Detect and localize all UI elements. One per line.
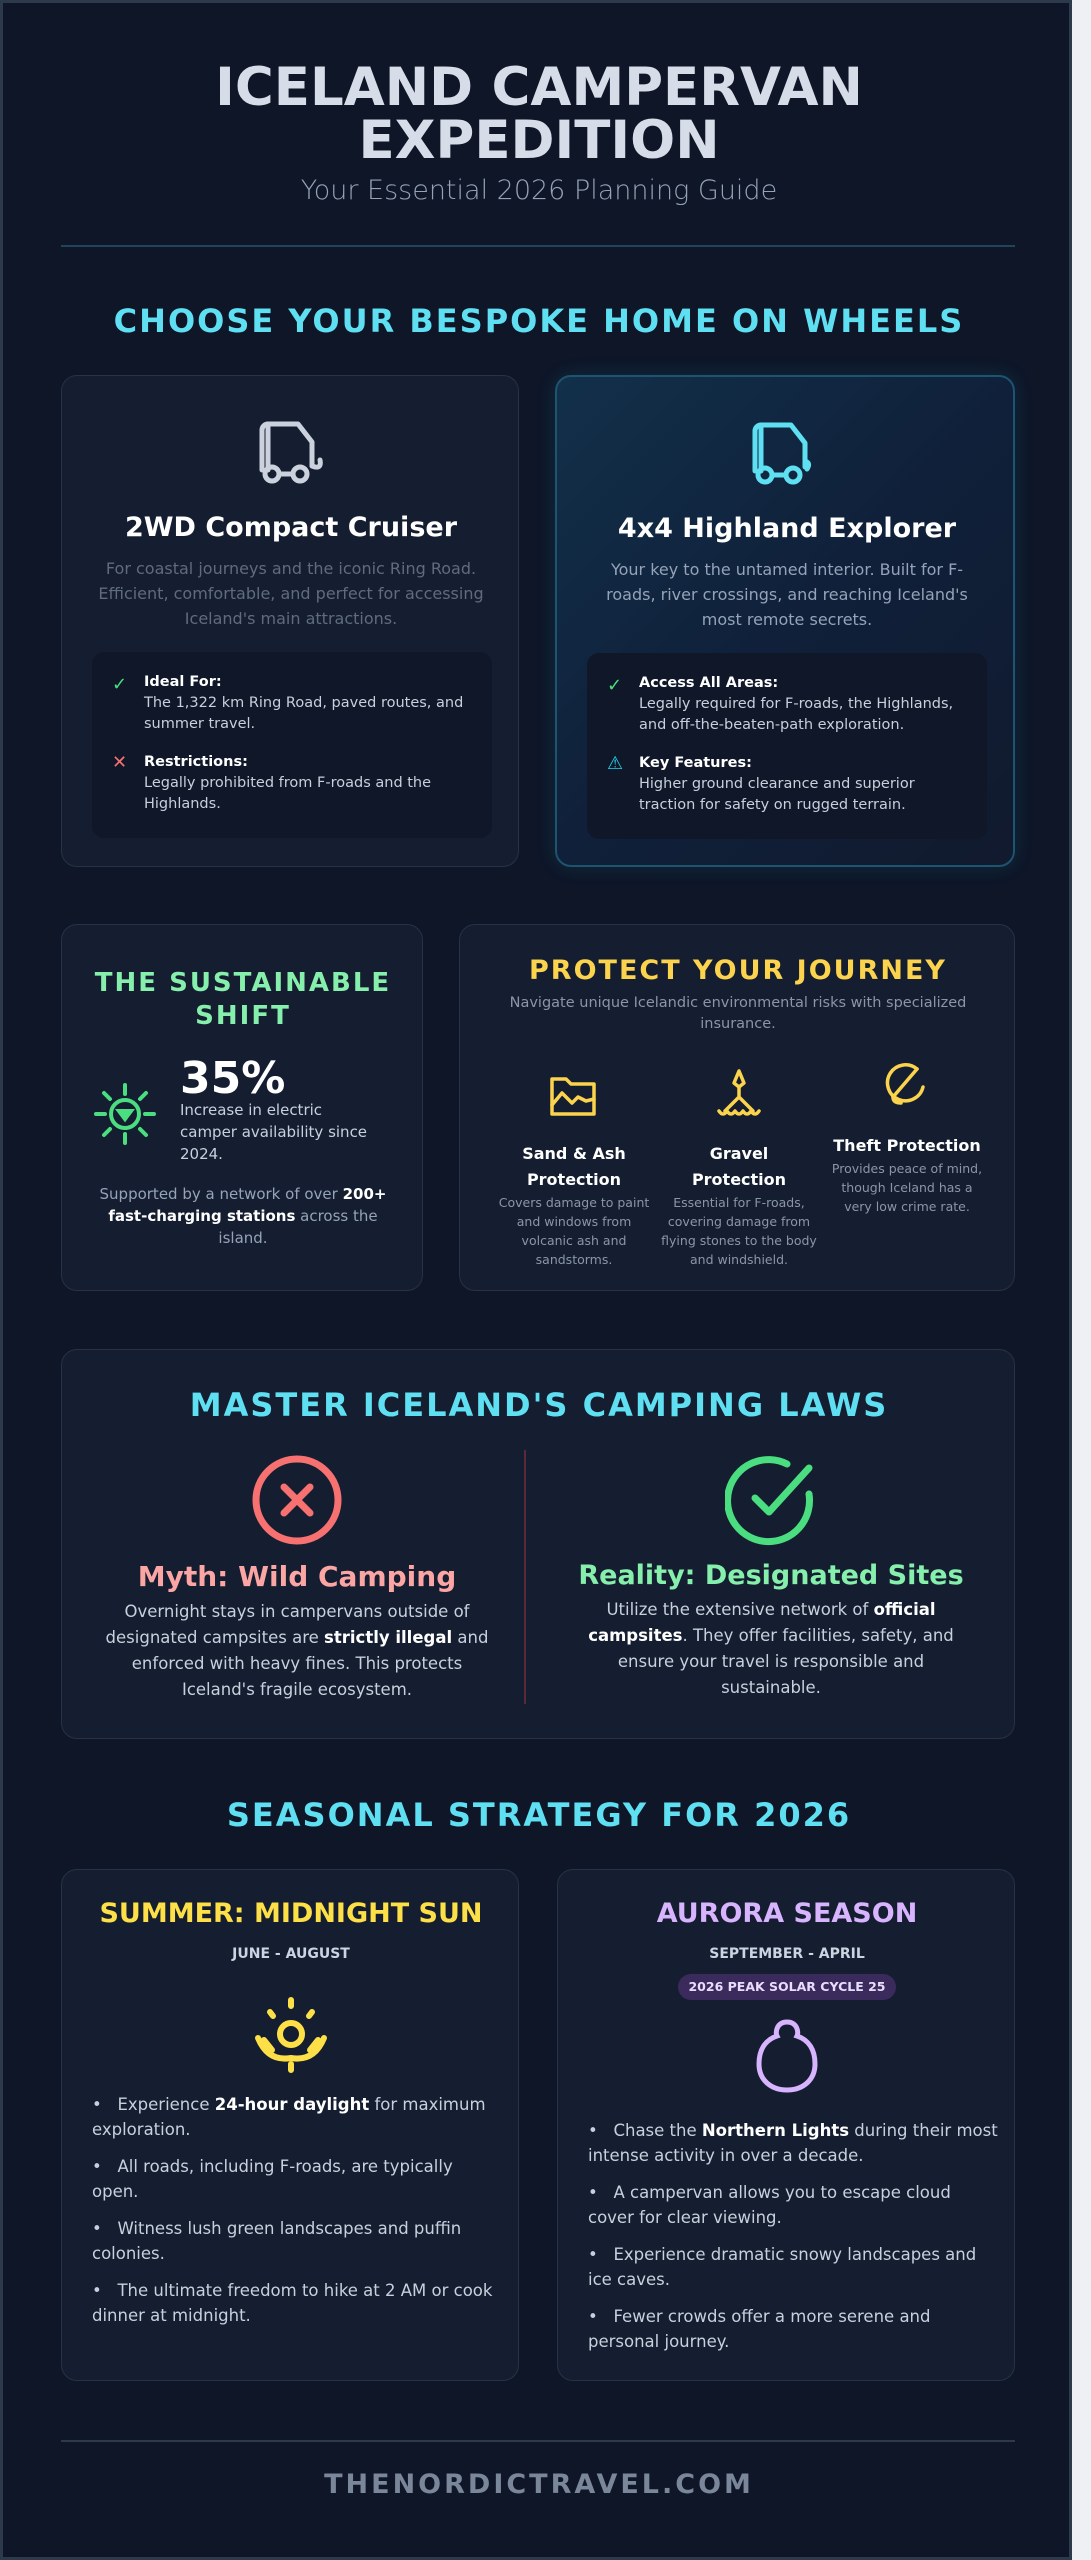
myth column: [106, 1456, 488, 1699]
panel: sustainable shift: [61, 924, 423, 1291]
icon: sun: [255, 1997, 327, 2073]
card title: 4x4 Highland Explorer: [618, 513, 956, 544]
item: access: Legally required for F-roads, the Highlands, and off-the-beaten-path exploration.: [639, 696, 953, 733]
heading: choose your home: CHOOSE YOUR BESPOKE HOME ON WHEELS: [114, 302, 964, 340]
column: sand & ash: Protection: [527, 1170, 621, 1189]
title: EXPEDITION: [358, 110, 720, 171]
icon: van cyan: [752, 422, 812, 484]
icon: aurora drop: [756, 2020, 818, 2092]
item: access: Access All Areas:: [639, 675, 778, 691]
bullet list: • Witness lush green landscapes and puffin colonies.: [92, 2219, 461, 2263]
column: gravel: [661, 1069, 817, 1267]
item: restrictions: ✕: [112, 752, 127, 773]
bullet list: • A campervan allows you to escape cloud: [588, 2183, 951, 2202]
icon: sun bulb: [94, 1083, 156, 1145]
myth column: Myth: Wild Camping: [138, 1560, 456, 1593]
card title: 2WD Compact Cruiser: [125, 512, 457, 543]
column: sand & ash: [499, 1077, 649, 1267]
heading: MASTER ICELAND'S CAMPING LAWS: [190, 1386, 888, 1424]
reality column: Utilize the extensive network of official campsites. They offer facilities, safety, and ensure your travel is responsible and sustainable.: [588, 1600, 954, 1697]
bullet list: • All roads, including F-roads, are typically open.: [92, 2157, 453, 2201]
feature box: [587, 653, 987, 839]
column: sand & ash: Sand & Ash: [522, 1144, 626, 1163]
bullet list: • Chase the Northern Lights during their most intense activity in over a decade.: [588, 2121, 998, 2165]
item: key features: Higher ground clearance and superior traction for safety on rugged terrain.: [639, 776, 915, 813]
bullet list: • Experience dramatic snowy landscapes and ice caves.: [588, 2245, 976, 2289]
note: Supported by a network of over 200+ fast-charging stations across the island.: [100, 1185, 386, 1247]
item: ideal for: The 1,322 km Ring Road, paved routes, and summer travel.: [144, 695, 463, 732]
reality column: Reality: Designated Sites: [578, 1560, 964, 1591]
panel: camping laws: [61, 1349, 1015, 1739]
item: access: ✓: [607, 675, 622, 696]
panel: aurora: AURORA SEASON: [657, 1898, 917, 1929]
icon: check circle: [725, 1456, 814, 1546]
divider: [524, 1450, 526, 1704]
title: ICELAND CAMPERVAN: [215, 57, 863, 118]
item: key features: Key Features:: [639, 755, 752, 771]
bullet list: cover for clear viewing.: [588, 2208, 782, 2227]
badge: [678, 1974, 896, 2000]
icon: x circle: [252, 1456, 342, 1544]
heading: THE SUSTAINABLE: [95, 968, 391, 998]
panel: summer: [61, 1869, 519, 2381]
description: For coastal journeys and the iconic Ring Road. Efficient, comfortable, and perfect for accessing Iceland's main attractions.: [98, 559, 484, 628]
item: ideal for: Ideal For:: [144, 674, 222, 690]
panel: protect your journey: [459, 924, 1015, 1291]
column: theft: Provides peace of mind, though Iceland has a very low crime rate.: [832, 1161, 982, 1214]
heading: PROTECT YOUR JOURNEY: [529, 955, 947, 986]
panel: aurora: SEPTEMBER - APRIL: [709, 1946, 865, 1962]
item: access: [607, 675, 953, 733]
badge: 2026 PEAK SOLAR CYCLE 25: [688, 1979, 886, 1994]
panel: summer: SUMMER: MIDNIGHT SUN: [99, 1898, 483, 1929]
bullet list: [588, 2121, 998, 2351]
column: gravel: Essential for F-roads, covering damage from flying stones to the body and windshield.: [661, 1195, 817, 1267]
column: theft: Theft Protection: [833, 1136, 981, 1155]
panel: protect your journey: Navigate unique Icelandic environmental risks with specialized insurance.: [510, 995, 966, 1032]
column: gravel: Protection: [692, 1170, 786, 1189]
reality column: [578, 1456, 964, 1697]
item: restrictions: Legally prohibited from F-roads and the Highlands.: [144, 775, 431, 812]
heading: seasonal: SEASONAL STRATEGY FOR 2026: [227, 1796, 851, 1834]
stat: 35%: [180, 1053, 285, 1104]
panel: 2WD: [61, 375, 519, 867]
bullet list: • Fewer crowds offer a more serene and personal journey.: [588, 2307, 930, 2351]
title: [215, 57, 863, 171]
panel: summer: JUNE - AUGUST: [232, 1946, 350, 1962]
bullet list: • The ultimate freedom to hike at 2 AM or cook dinner at midnight.: [92, 2281, 492, 2325]
item: ideal for: [112, 674, 463, 732]
column: gravel: Gravel: [710, 1144, 768, 1163]
item: restrictions: Restrictions:: [144, 754, 248, 770]
heading: SHIFT: [195, 1001, 291, 1031]
icon: van grey: [260, 422, 323, 484]
subtitle: Your Essential 2026 Planning Guide: [301, 175, 777, 206]
panel: 4x4: [555, 375, 1015, 867]
myth column: Overnight stays in campervans outside of designated campsites are strictly illegal and enforced with heavy fines. This protects Iceland's fragile ecosystem.: [106, 1602, 488, 1699]
item: key features: ⚠: [607, 753, 623, 774]
panel: sustainable shift: Increase in electric camper availability since 2024.: [180, 1101, 367, 1163]
feature box: [92, 652, 492, 838]
item: restrictions: [112, 752, 431, 812]
bullet list: [92, 2095, 492, 2325]
description: Your key to the untamed interior. Built for F-roads, river crossings, and reaching Iceland's most remote secrets.: [606, 560, 968, 629]
item: key features: [607, 753, 915, 813]
bullet list: • Experience 24-hour daylight for maximum exploration.: [92, 2095, 486, 2139]
footer: THENORDICTRAVEL.COM: [324, 2469, 754, 2500]
panel: aurora: [557, 1869, 1015, 2381]
heading: [94, 968, 391, 1031]
item: ideal for: ✓: [112, 674, 127, 695]
column: theft: [832, 1063, 982, 1214]
column: sand & ash: Covers damage to paint and windows from volcanic ash and sandstorms.: [499, 1195, 649, 1267]
